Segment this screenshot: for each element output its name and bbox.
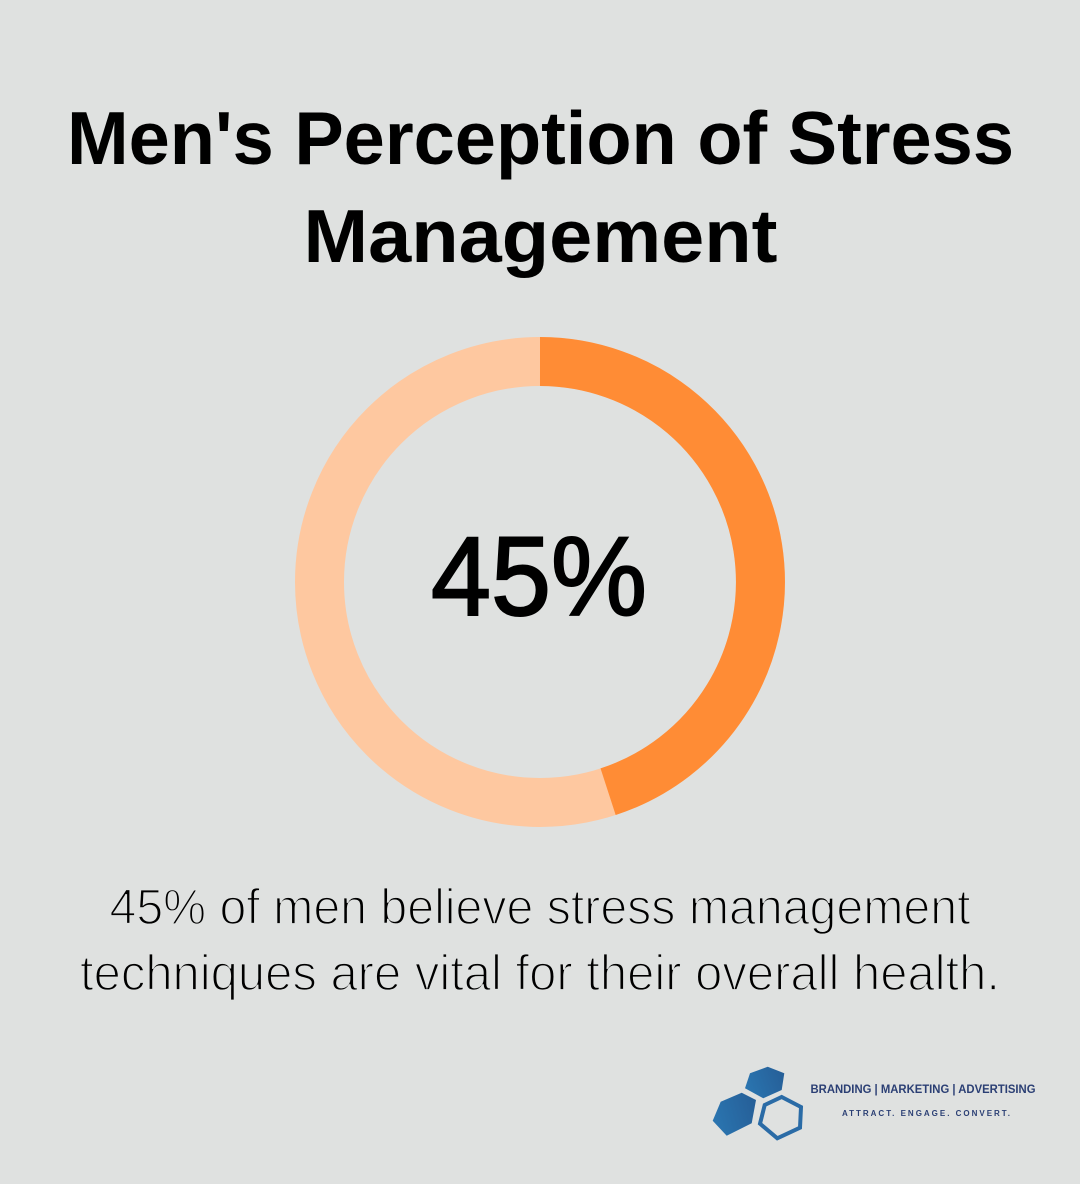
description: 45% of men believe stress management xyxy=(110,879,971,935)
center value: 45% xyxy=(431,514,647,639)
description: techniques are vital for their overall health. xyxy=(80,945,1000,1001)
icon: hexagons xyxy=(713,1067,801,1138)
logo tagline: BRANDING | MARKETING | ADVERTISING xyxy=(810,1084,1036,1096)
title: Management xyxy=(304,194,778,278)
description xyxy=(80,879,1000,1001)
title: Men's Perception of Stress xyxy=(67,96,1014,180)
donut chart: 45% xyxy=(320,362,760,802)
logo xyxy=(713,1067,1036,1138)
logo slogan: ATTRACT. ENGAGE. CONVERT. xyxy=(842,1109,1010,1118)
title xyxy=(67,96,1014,278)
